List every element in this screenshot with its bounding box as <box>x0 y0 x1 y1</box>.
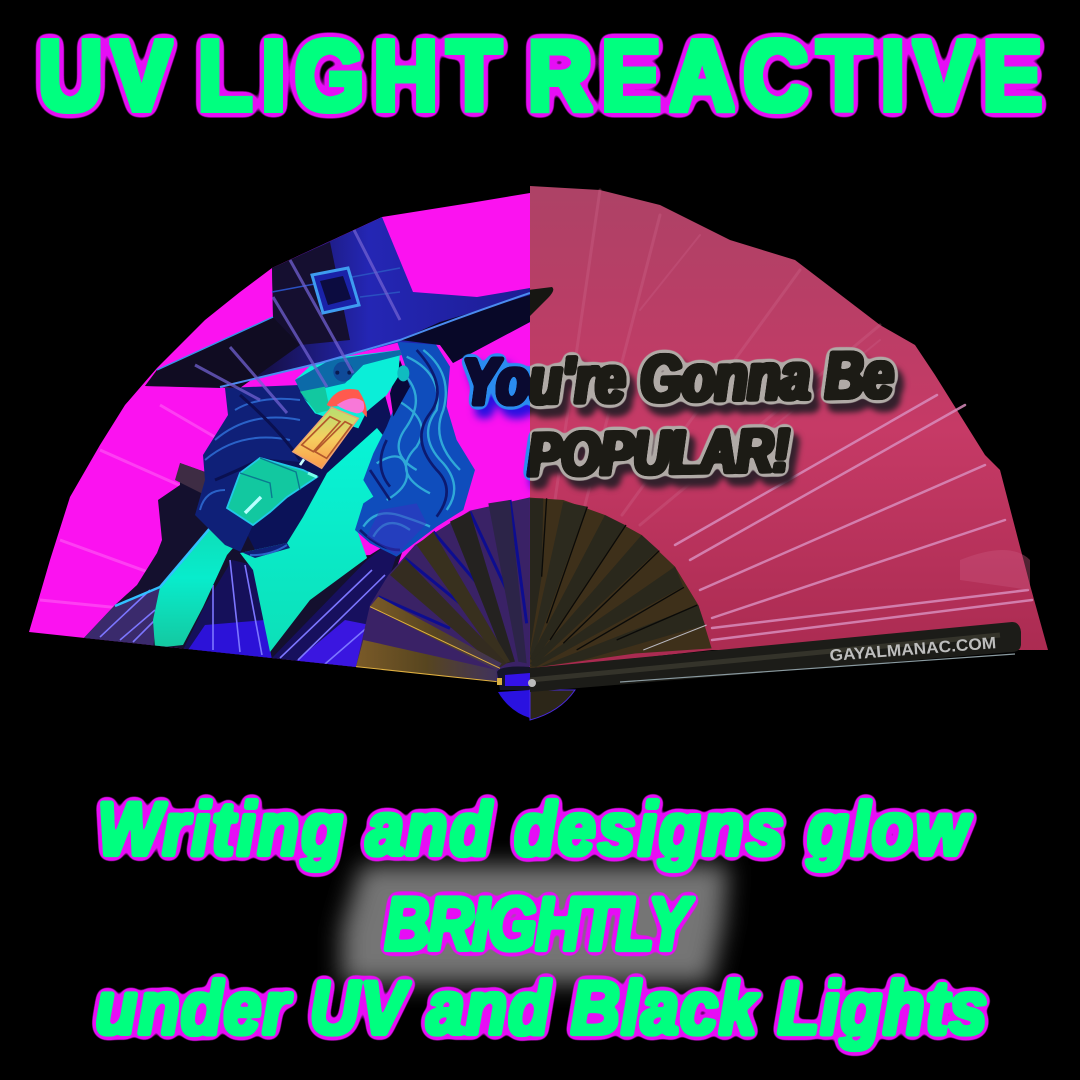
website text: GAYALMANAC.COM <box>829 634 997 665</box>
fan <box>29 186 1048 720</box>
arm <box>153 530 233 647</box>
popsicle <box>293 407 358 468</box>
pink fabric <box>530 186 1048 670</box>
left hair <box>195 385 325 558</box>
face <box>295 350 409 428</box>
"You" lettering with blue outline: You're Gonna Be <box>462 337 894 420</box>
fan slogan: You're Gonna Be POPULAR! <box>530 346 908 494</box>
caption <box>95 788 987 1051</box>
dark hair behind hand and neck <box>248 396 391 550</box>
right hair <box>355 335 475 557</box>
title: UV LIGHT REACTIVE <box>38 21 1042 132</box>
right half: unlit fabric <box>530 186 1048 668</box>
hat <box>145 217 552 413</box>
chest <box>240 428 395 652</box>
handle bar <box>530 622 1021 692</box>
icon: hat buckle <box>312 268 359 313</box>
caption line 1: Writing and designs glow <box>97 788 973 872</box>
"You" lettering with blue outline <box>462 353 530 494</box>
caption line 2: BRIGHTLY <box>385 881 695 966</box>
fan slogan: You're Gonna Be POPULAR!: POPULAR! <box>527 416 790 490</box>
knob <box>498 690 530 718</box>
glow behind BRIGHTLY <box>342 865 728 983</box>
hinge cap <box>497 667 530 690</box>
fabric crease highlights <box>40 405 220 610</box>
handle with website <box>497 622 1021 720</box>
caption line 3: under UV and Black Lights <box>95 967 987 1051</box>
witch illustration <box>82 217 552 672</box>
"You" lettering with blue outline: POPULAR! <box>527 416 790 490</box>
fan slogan: You're Gonna Be POPULAR!: You're Gonna Be <box>462 337 894 420</box>
hand <box>227 458 317 525</box>
lips <box>327 389 367 417</box>
magenta fabric <box>29 193 530 680</box>
coat <box>82 463 410 672</box>
ribs: right <box>527 497 712 668</box>
hat brim tip <box>530 287 554 316</box>
left half: UV-lit fabric <box>29 193 530 682</box>
pleats and highlights <box>555 190 1032 640</box>
ribs: left <box>356 497 530 682</box>
